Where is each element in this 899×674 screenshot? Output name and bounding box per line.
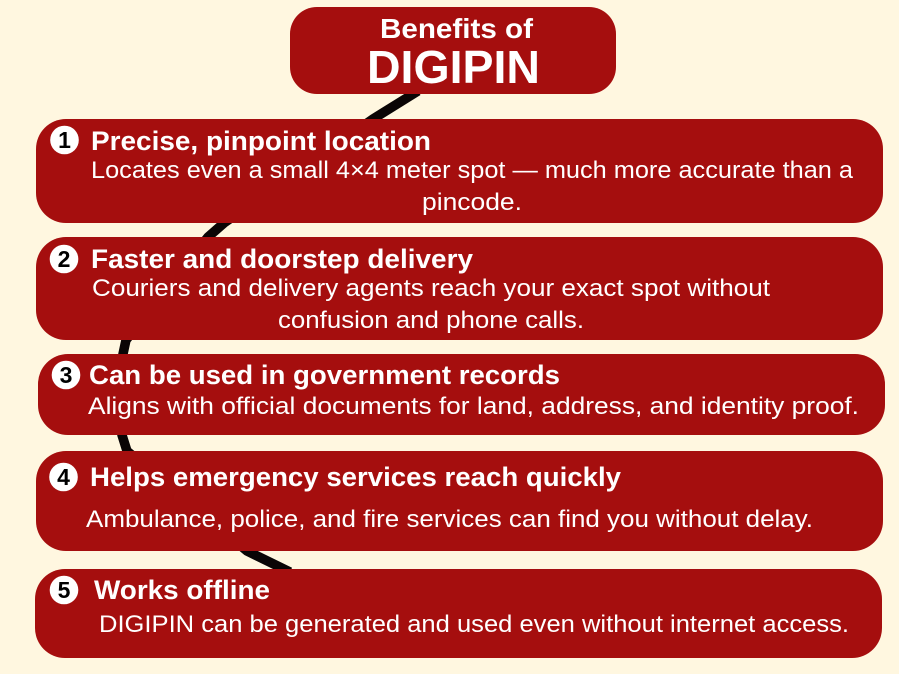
number badge 1 bbox=[50, 126, 79, 154]
number badge 1: 1 bbox=[58, 127, 71, 153]
body 3: Aligns with official documents for land, address, and identity proof. bbox=[88, 393, 859, 420]
number badge 2 bbox=[50, 245, 78, 273]
number badge 2: 2 bbox=[58, 246, 70, 272]
panel: benefit 3 bbox=[38, 354, 885, 435]
heading 1: Precise, pinpoint location bbox=[91, 126, 431, 156]
title line 2: DIGIPIN bbox=[367, 41, 540, 93]
panel: benefit 1 bbox=[36, 119, 883, 223]
body 1 line 2: pincode. bbox=[422, 189, 522, 216]
heading 5: Works offline bbox=[94, 575, 270, 605]
heading 4: Helps emergency services reach quickly bbox=[90, 462, 621, 492]
heading 3: Can be used in government records bbox=[89, 360, 560, 390]
number badge 3: 3 bbox=[60, 362, 72, 388]
number badge 4 bbox=[49, 463, 78, 491]
title panel bbox=[290, 7, 616, 94]
body 2 line 1: Couriers and delivery agents reach your exact spot without bbox=[92, 275, 770, 302]
body 5: DIGIPIN can be generated and used even without internet access. bbox=[99, 611, 849, 638]
number badge 4: 4 bbox=[57, 464, 70, 490]
panel: benefit 2 bbox=[36, 237, 883, 340]
body 4: Ambulance, police, and fire services can find you without delay. bbox=[86, 506, 813, 533]
panel: benefit 4 bbox=[36, 451, 883, 551]
panel: benefit 5 bbox=[35, 569, 882, 658]
number badge 5: 5 bbox=[58, 577, 71, 603]
body 2 line 2: confusion and phone calls. bbox=[278, 307, 584, 334]
number badge 5 bbox=[50, 576, 78, 604]
connecting curved line bbox=[122, 91, 418, 572]
title line 1: Benefits of bbox=[380, 13, 534, 44]
heading 2: Faster and doorstep delivery bbox=[91, 244, 473, 274]
body 1 line 1: Locates even a small 4×4 meter spot — much more accurate than a bbox=[91, 157, 854, 184]
number badge 3 bbox=[52, 361, 80, 389]
